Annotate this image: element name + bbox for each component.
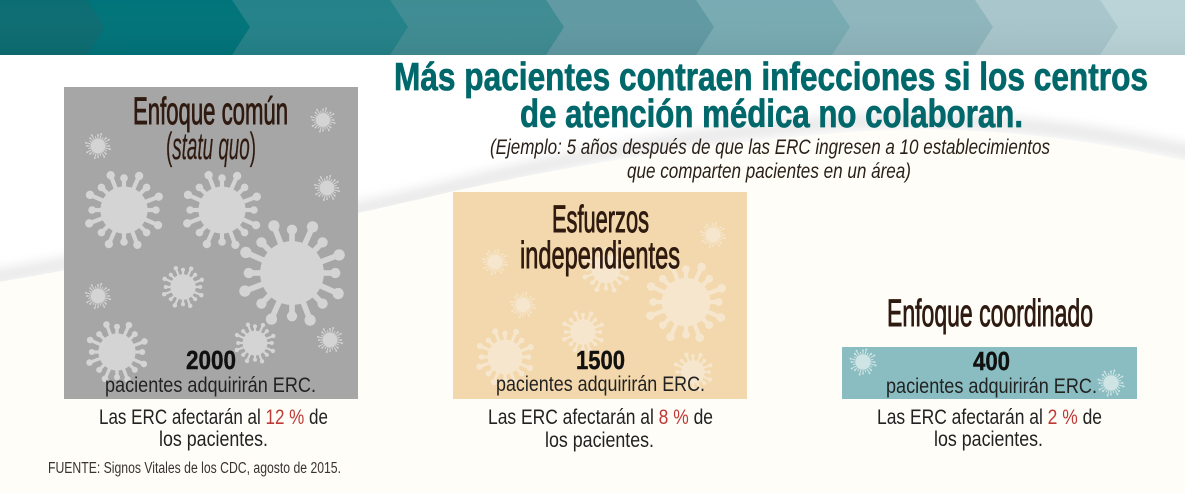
panel: enfoque coordinado: [842, 346, 1137, 399]
panel 2 label: pacientes adquirirán ERC.: [496, 372, 705, 396]
panel 1 heading: (statu quo): [166, 126, 256, 168]
caption: 2 %: [877, 405, 1102, 451]
panel 1 heading: [133, 91, 288, 168]
source: FUENTE: Signos Vitales de los CDC, agosto de 2015.: [48, 460, 341, 477]
panel 2 heading: independientes: [520, 235, 680, 277]
panel 1 label: pacientes adquirirán ERC.: [105, 373, 316, 397]
panel 2 heading: Esfuerzos: [552, 199, 649, 241]
panel 2 number: 1500: [576, 345, 625, 375]
header chevron band: [0, 0, 1185, 55]
panel 1 number: 2000: [186, 345, 236, 375]
title: de atención médica no colaboran.: [520, 93, 1023, 136]
panel 2 viruses: [474, 222, 730, 393]
subtitle: (Ejemplo: 5 años después de que las ERC ingresen a 10 establecimientos: [490, 136, 1050, 159]
subtitle: [490, 136, 1050, 183]
panel 3 viruses: [849, 348, 1125, 397]
caption: 8 %: [488, 405, 713, 452]
panel: enfoque común: [64, 87, 358, 399]
caption: 8 %: Las ERC afectarán al 8 % de: [488, 405, 713, 429]
panel 1 background: [64, 87, 358, 399]
panel 1 heading: Enfoque común: [133, 91, 288, 133]
caption: 12 %: Las ERC afectarán al 12 % de: [99, 405, 328, 429]
caption: 12 %: los pacientes.: [159, 427, 268, 451]
caption: 2 %: los pacientes.: [934, 427, 1043, 451]
subtitle: que comparten pacientes en un área): [627, 160, 911, 183]
panel 1 viruses: [81, 107, 350, 386]
panel 3 label: pacientes adquirirán ERC.: [886, 374, 1097, 398]
caption: 12 %: [99, 405, 328, 451]
panel: esfuerzos independientes: [453, 192, 747, 399]
panel 3 number: 400: [973, 346, 1010, 376]
panel 2 background: [453, 192, 747, 399]
caption: 8 %: los pacientes.: [545, 428, 654, 452]
caption: 2 %: Las ERC afectarán al 2 % de: [877, 405, 1102, 429]
panel 3 background: [842, 347, 1137, 399]
title: [394, 56, 1148, 136]
panel 2 heading: [520, 199, 680, 277]
